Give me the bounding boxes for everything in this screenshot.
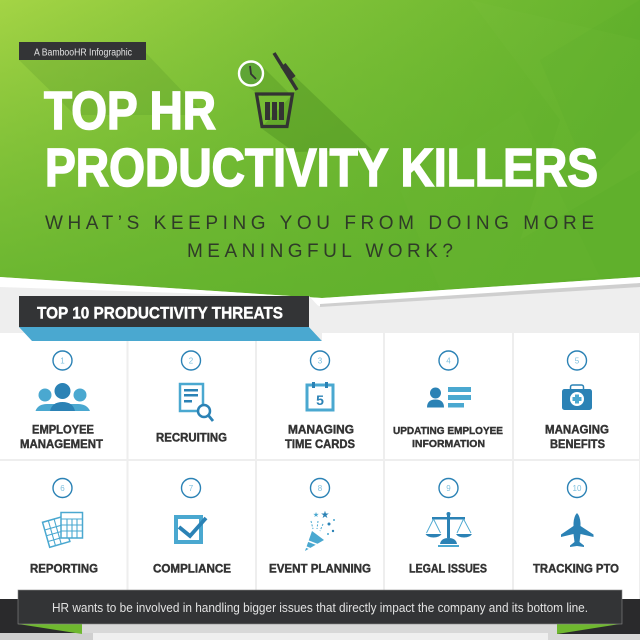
item 4: updating employee information: UPDATING EMPLOYEE bbox=[393, 425, 503, 437]
item 5: managing benefits: 5 bbox=[575, 356, 580, 366]
item 9: legal issues: 9 bbox=[446, 484, 451, 493]
white band under hero bbox=[0, 277, 640, 307]
tag: A BambooHR Infographic bbox=[19, 42, 146, 60]
icon: team bbox=[36, 383, 90, 411]
icon: clock and trash can bbox=[239, 53, 297, 126]
long shadows bbox=[19, 53, 372, 152]
item 9: legal issues: LEGAL ISSUES bbox=[409, 564, 487, 576]
title bbox=[44, 81, 598, 198]
icon: airplane bbox=[561, 513, 594, 547]
item 8: event planning: 8 bbox=[318, 484, 323, 493]
item 2: recruiting: RECRUITING bbox=[156, 432, 227, 444]
icon: clock bbox=[239, 62, 263, 86]
icon: document and magnifier bbox=[180, 384, 213, 421]
grid row 1 cells bbox=[0, 333, 639, 459]
item 5: managing benefits: MANAGING bbox=[545, 424, 609, 436]
icon: calendar: 5 bbox=[316, 392, 324, 408]
item 5: managing benefits: BENEFITS bbox=[550, 439, 605, 451]
item 2: recruiting: 2 bbox=[189, 356, 194, 366]
icon: trash can bbox=[256, 94, 292, 126]
item 1: employee management bbox=[20, 351, 103, 451]
icon: party popper: ★ bbox=[321, 510, 330, 521]
callout banner bbox=[18, 590, 622, 624]
item 3: managing time cards: MANAGING bbox=[288, 424, 354, 436]
icon: person with lines bbox=[427, 387, 471, 408]
panel: grid of ten threats bbox=[0, 333, 639, 601]
item 1: employee management: MANAGEMENT bbox=[20, 439, 103, 451]
callout banner: HR wants to be involved in handling bigger issues that directly impact the company and its bottom line. bbox=[52, 600, 588, 615]
tag: A BambooHR Infographic: A BambooHR Infographic bbox=[34, 48, 132, 58]
item 3: managing time cards: TIME CARDS bbox=[285, 439, 355, 451]
item 3: managing time cards bbox=[285, 351, 355, 451]
item 10: tracking pto bbox=[533, 478, 619, 576]
icon: trash lid bbox=[274, 53, 297, 90]
icon: scales bbox=[426, 512, 472, 547]
item 6: reporting: REPORTING bbox=[30, 564, 98, 576]
subtitle: MEANINGFUL WORK? bbox=[187, 241, 453, 262]
section heading: top 10 productivity threats: TOP 10 PRODUCTIVITY THREATS bbox=[37, 304, 283, 322]
item 3: managing time cards: 3 bbox=[318, 356, 323, 366]
item 4: updating employee information: 4 bbox=[446, 356, 451, 366]
item 10: tracking pto: TRACKING PTO bbox=[533, 564, 619, 576]
icon: party popper: ★ bbox=[313, 511, 319, 519]
item 1: employee management: 1 bbox=[60, 356, 65, 366]
grid row 2 cells bbox=[0, 461, 639, 601]
panel: green hero background bbox=[0, 0, 640, 298]
item 9: legal issues bbox=[409, 478, 487, 576]
section heading: top 10 productivity threats bbox=[19, 296, 322, 341]
icon: first aid kit bbox=[562, 385, 592, 410]
item 7: compliance bbox=[153, 478, 231, 576]
icon: checkbox bbox=[176, 517, 206, 542]
item 4: updating employee information bbox=[393, 351, 503, 450]
item 6: reporting: 6 bbox=[60, 484, 65, 493]
banner folds and bottom band bbox=[0, 599, 640, 640]
icon: spreadsheets bbox=[43, 512, 82, 547]
item 7: compliance: COMPLIANCE bbox=[153, 564, 231, 576]
item 1: employee management: EMPLOYEE bbox=[32, 424, 94, 436]
item 8: event planning bbox=[269, 478, 371, 576]
item 4: updating employee information: INFORMATION bbox=[412, 438, 485, 450]
subtitle: WHAT’S KEEPING YOU FROM DOING MORE bbox=[45, 213, 594, 234]
title: TOP HR bbox=[44, 81, 216, 141]
item 7: compliance: 7 bbox=[189, 484, 194, 493]
item 2: recruiting bbox=[156, 351, 227, 444]
icon: party popper bbox=[305, 510, 335, 551]
item 10: tracking pto: 10 bbox=[573, 484, 582, 493]
subtitle bbox=[45, 213, 594, 262]
item 8: event planning: EVENT PLANNING bbox=[269, 564, 371, 576]
item 6: reporting bbox=[30, 478, 98, 576]
item 5: managing benefits bbox=[545, 351, 609, 451]
